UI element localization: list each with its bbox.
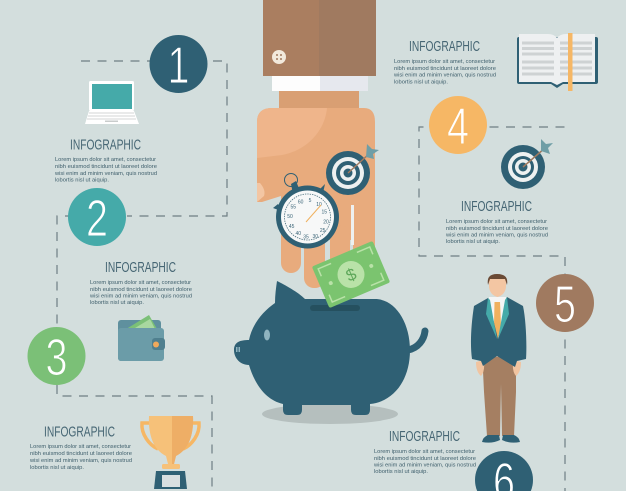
text block top right: nibh euismod tincidunt ut laoreet dolore	[394, 66, 496, 72]
icon: stopwatch: 60	[298, 200, 304, 206]
number circle 5: 5	[554, 275, 576, 333]
icon: stopwatch: 40	[296, 231, 301, 237]
text block 4	[445, 198, 548, 245]
icon: stopwatch: 30	[313, 234, 318, 240]
text block 2: nibh euismod tincidunt ut laoreet dolore	[90, 287, 192, 293]
sleeve	[263, 0, 376, 76]
text block 2: Lorem ipsum dolor sit amet, consectetur	[90, 280, 191, 286]
illustration: businessman	[471, 274, 526, 443]
icon: wallet	[118, 315, 165, 361]
text block top right: wisi enim ad minim veniam, quis nostrud	[393, 72, 496, 78]
text block 6: lobortis nisl ut aiquip.	[374, 469, 428, 475]
number circle 6	[475, 451, 533, 491]
icon: stopwatch: 25	[320, 228, 326, 234]
text block 1: INFOGRAPHIC	[70, 136, 141, 154]
icon: stopwatch: 45	[289, 224, 295, 230]
icon: stopwatch: 10	[316, 202, 322, 208]
shirt cuff	[272, 76, 368, 91]
number circle 3: 3	[46, 328, 67, 386]
icon: banknote: $	[343, 264, 360, 286]
icon: stopwatch: 55	[291, 204, 296, 210]
icon: laptop	[85, 81, 139, 124]
text block 1	[54, 136, 157, 184]
number circle 3	[28, 327, 86, 386]
text block top right: INFOGRAPHIC	[409, 38, 480, 55]
icon: piggy bank	[234, 281, 425, 415]
text block 3: Lorem ipsum dolor sit amet, consectetur	[30, 444, 131, 450]
icon: stopwatch: 35	[303, 234, 309, 240]
number circle 1: 1	[168, 36, 189, 94]
icon: piggy bank shadow	[262, 404, 398, 424]
number circle 5	[536, 274, 594, 333]
text block 1: nibh euismod tincidunt ut laoreet dolore	[55, 164, 157, 170]
number circle 1	[150, 35, 208, 94]
wrist	[279, 91, 359, 109]
text block 4: lobortis nisl ut aiquip.	[446, 239, 500, 245]
icon: stopwatch: 50	[287, 214, 293, 220]
text block 6	[373, 428, 476, 475]
text block top right: Lorem ipsum dolor sit amet, consectetur	[394, 59, 495, 65]
number circle 2	[68, 188, 126, 247]
text block 2: lobortis nisl ut aiquip.	[90, 300, 144, 306]
text block 4: INFOGRAPHIC	[461, 198, 532, 215]
icon: target with arrow, on hand	[326, 144, 379, 195]
icon: stopwatch	[273, 174, 339, 248]
text block 3: INFOGRAPHIC	[44, 424, 115, 440]
icon: book	[517, 33, 598, 91]
illustration: hand with suit sleeve	[257, 0, 376, 288]
number circle 4	[429, 96, 487, 155]
text block 3: wisi enim ad minim veniam, quis nostrud	[29, 458, 132, 464]
number circle 4: 4	[447, 97, 469, 155]
text block 4: nibh euismod tincidunt ut laoreet dolore	[446, 226, 548, 232]
text block 6: wisi enim ad minim veniam, quis nostrud	[373, 462, 476, 468]
text block 4: Lorem ipsum dolor sit amet, consectetur	[446, 219, 547, 225]
number circle 2: 2	[86, 189, 108, 247]
text block top right: lobortis nisl ut aiquip.	[394, 80, 448, 86]
text block 2	[89, 259, 192, 306]
text block 6: INFOGRAPHIC	[389, 428, 460, 445]
text block 2: INFOGRAPHIC	[105, 259, 176, 276]
text block top right	[393, 38, 496, 86]
text block 6: nibh euismod tincidunt ut laoreet dolore	[374, 456, 476, 462]
icon: stopwatch: 20	[323, 220, 329, 226]
icon: target with arrow, right panel	[501, 139, 553, 189]
text block 1: Lorem ipsum dolor sit amet, consectetur	[55, 157, 156, 163]
icon: trophy	[142, 416, 199, 489]
text block 3: nibh euismod tincidunt ut laoreet dolore	[30, 451, 132, 457]
text block 1: wisi enim ad minim veniam, quis nostrud	[54, 171, 157, 177]
text block 3: lobortis nisl ut aiquip.	[30, 465, 84, 471]
icon: banknote	[312, 241, 390, 308]
text block 2: wisi enim ad minim veniam, quis nostrud	[89, 294, 192, 300]
icon: stopwatch: 15	[322, 210, 327, 216]
text block 4: wisi enim ad minim veniam, quis nostrud	[445, 232, 548, 238]
text block 3	[29, 424, 132, 471]
text block 1: lobortis nisl ut aiquip.	[55, 178, 109, 184]
text block 6: Lorem ipsum dolor sit amet, consectetur	[374, 449, 475, 455]
palm and fingers	[257, 108, 375, 288]
icon: stopwatch: 5	[309, 198, 312, 204]
